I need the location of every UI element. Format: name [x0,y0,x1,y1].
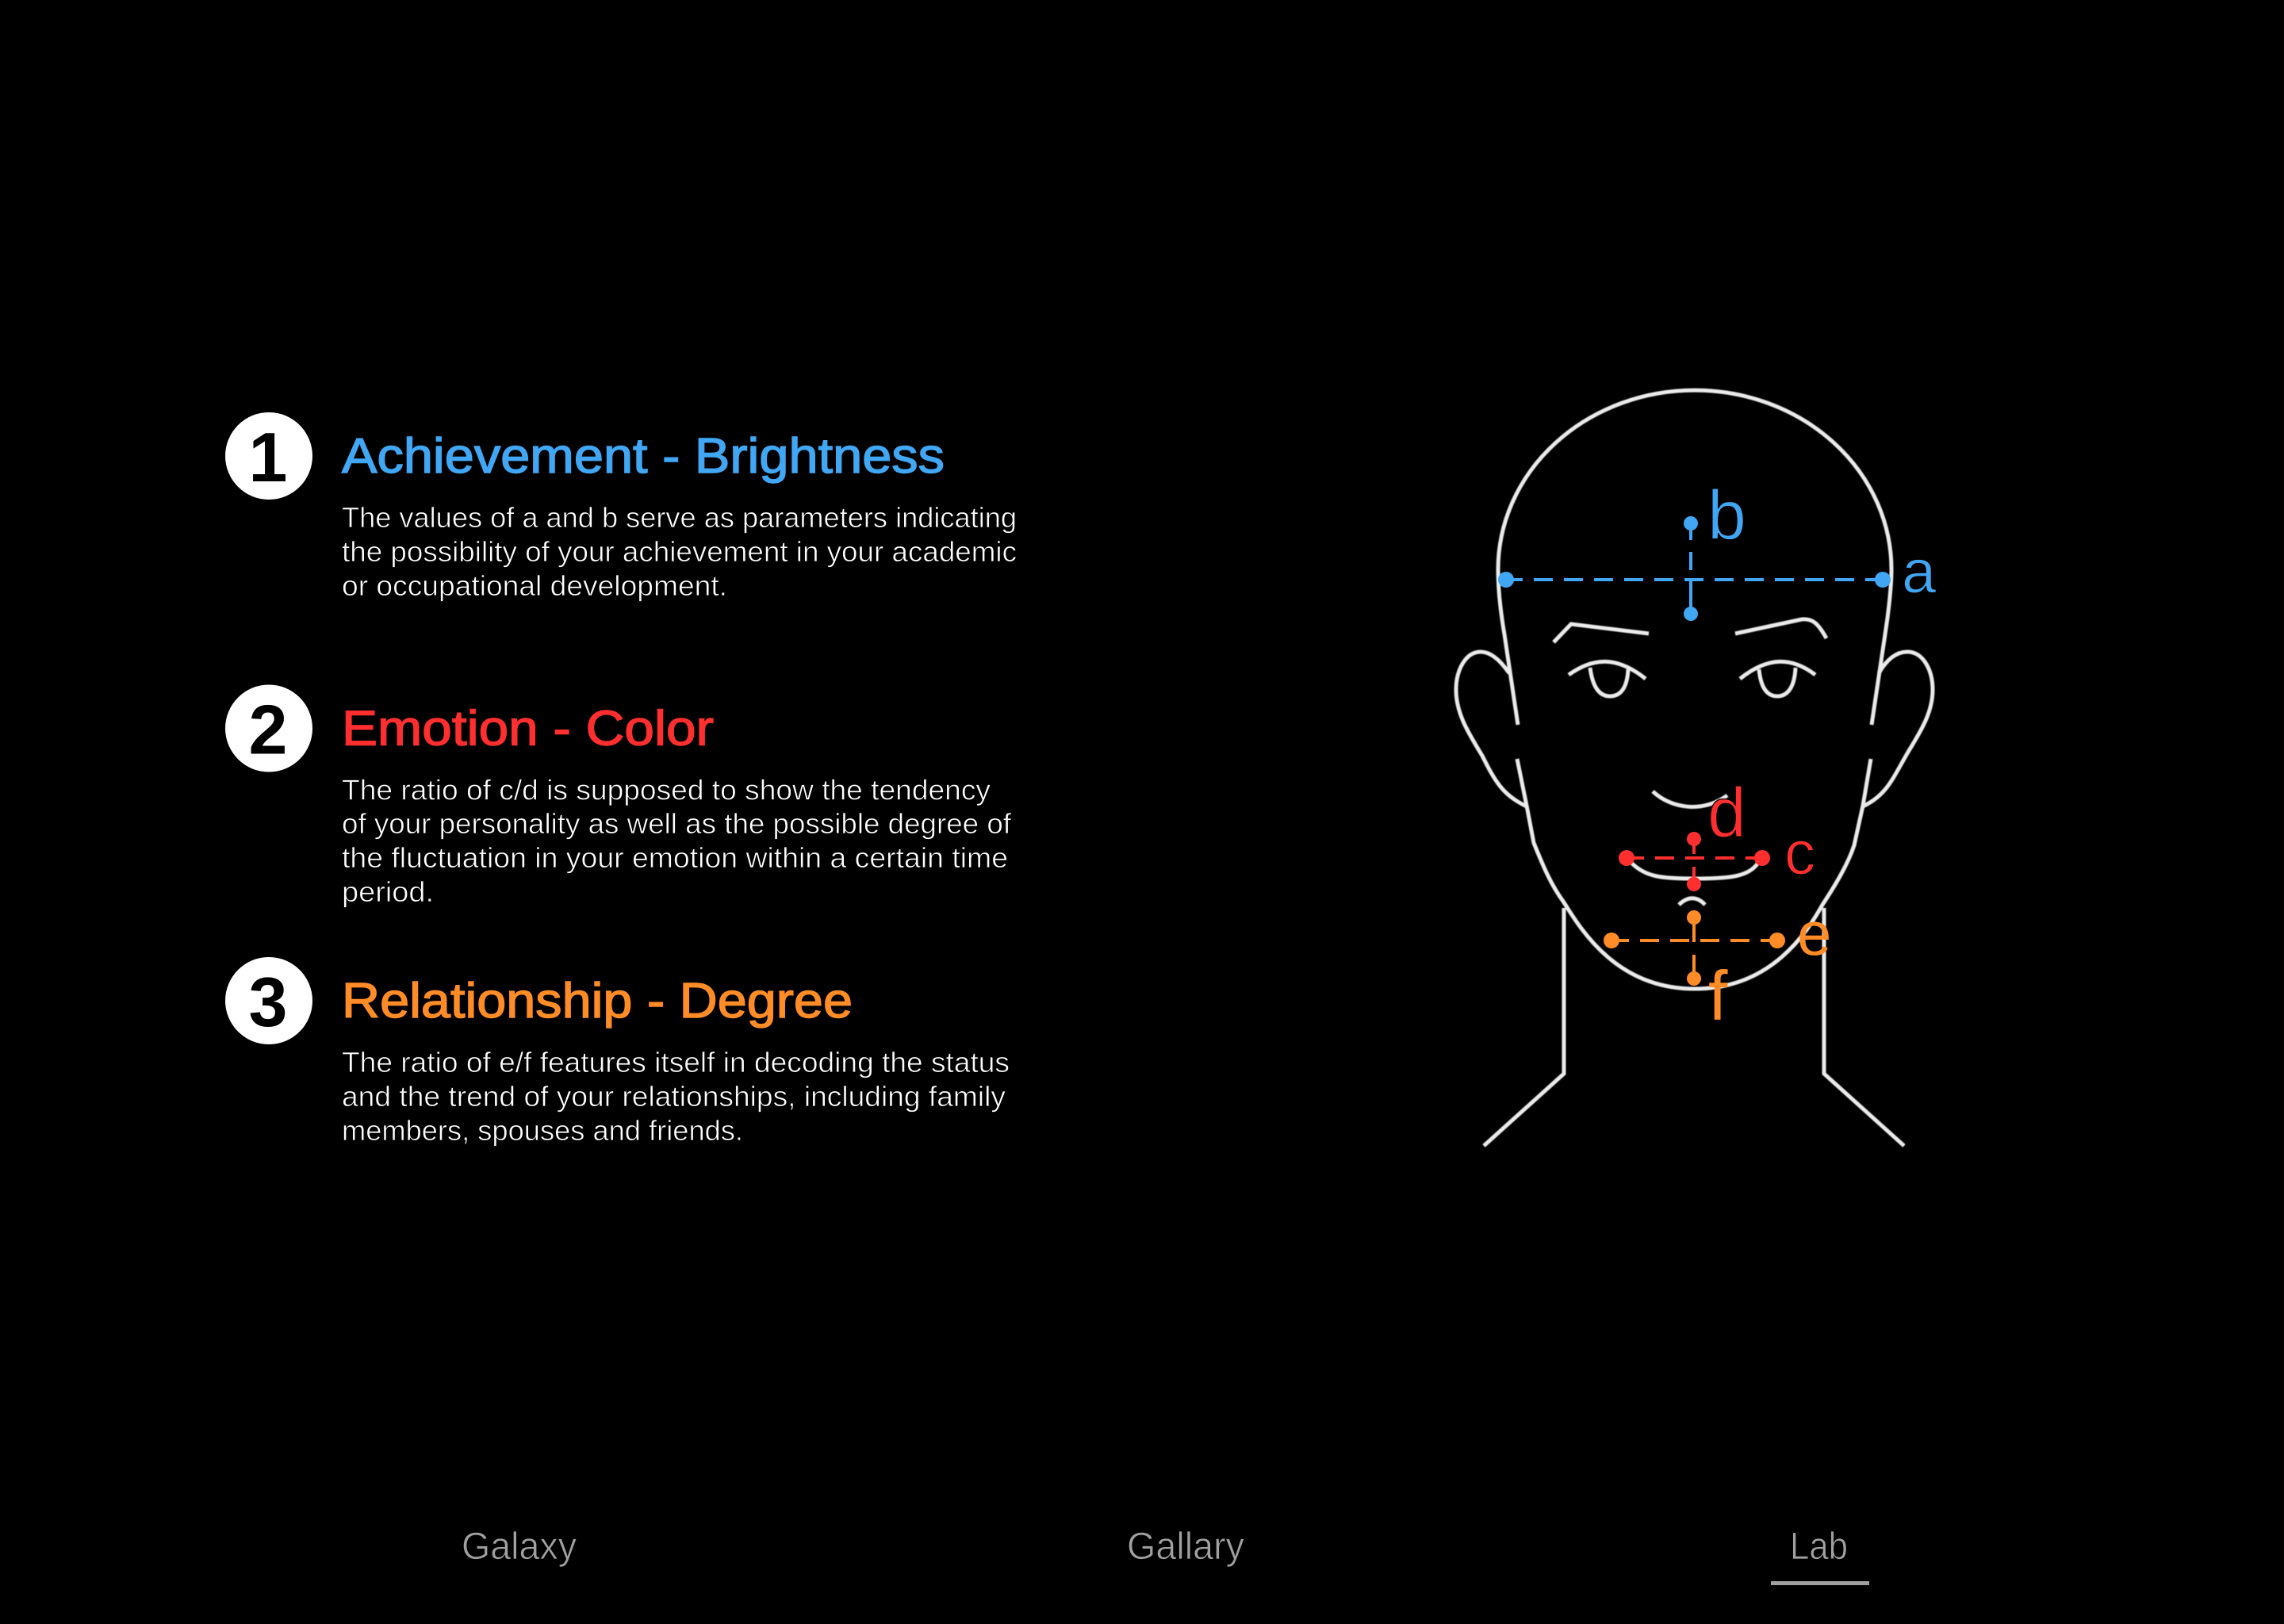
nav item: Lab (active) [1771,1526,1869,1585]
measurement: a and b (blue): a [1902,536,1937,606]
icon: head outline [1456,390,1933,1146]
text block: achievement description: or occupational development. [342,569,727,602]
number badge 2 [225,685,312,772]
measurement: c and d (red): c [1784,818,1815,887]
text block: achievement description [342,501,1017,602]
nav item: Gallary: Gallary [1127,1526,1244,1568]
panel: emotion explanation [225,685,1012,908]
text block: relationship description: members, spouses and friends. [342,1114,743,1147]
number badge 3: 3 [249,963,287,1041]
heading: Relationship - Degree: Relationship - Degree [342,974,853,1028]
panel: relationship explanation [225,957,1010,1147]
text block: emotion description: period. [342,875,434,908]
navigation bar [462,1526,1869,1585]
number badge 2: 2 [249,690,287,769]
text block: emotion description: of your personality as well as the possible degree of [342,807,1012,840]
measurement: c and d (red) [1619,773,1815,891]
measurement: e and f (orange): e [1797,898,1831,968]
text block: emotion description: the fluctuation in your emotion within a certain time [342,841,1008,874]
measurement: c and d (red): d [1707,773,1746,852]
text block: emotion description [342,774,1012,908]
text block: achievement description: The values of a and b serve as parameters indicating [342,501,1017,534]
nav item: Galaxy: Galaxy [462,1526,577,1568]
text block: relationship description [342,1046,1010,1147]
panel: achievement explanation [225,412,1017,602]
measurement: e and f (orange): f [1708,956,1728,1035]
measurement: e and f (orange) [1604,898,1831,1035]
measurement: a and b (blue) [1498,476,1937,621]
measurement: a and b (blue): b [1707,476,1746,554]
number badge 3 [225,957,312,1044]
number badge 1 [225,412,312,500]
text block: achievement description: the possibility of your achievement in your academic [342,535,1017,568]
number badge 1: 1 [249,418,287,496]
text block: relationship description: and the trend of your relationships, including family [342,1080,1006,1113]
text block: relationship description: The ratio of e/f features itself in decoding the status [342,1046,1010,1078]
text block: emotion description: The ratio of c/d is supposed to show the tendency [342,774,991,806]
heading: Emotion - Color: Emotion - Color [342,701,714,756]
heading: Achievement - Brightness: Achievement - Brightness [342,429,945,484]
chart: face diagram with measurements [1456,390,1937,1146]
nav item: Lab (active): Lab [1790,1526,1848,1568]
